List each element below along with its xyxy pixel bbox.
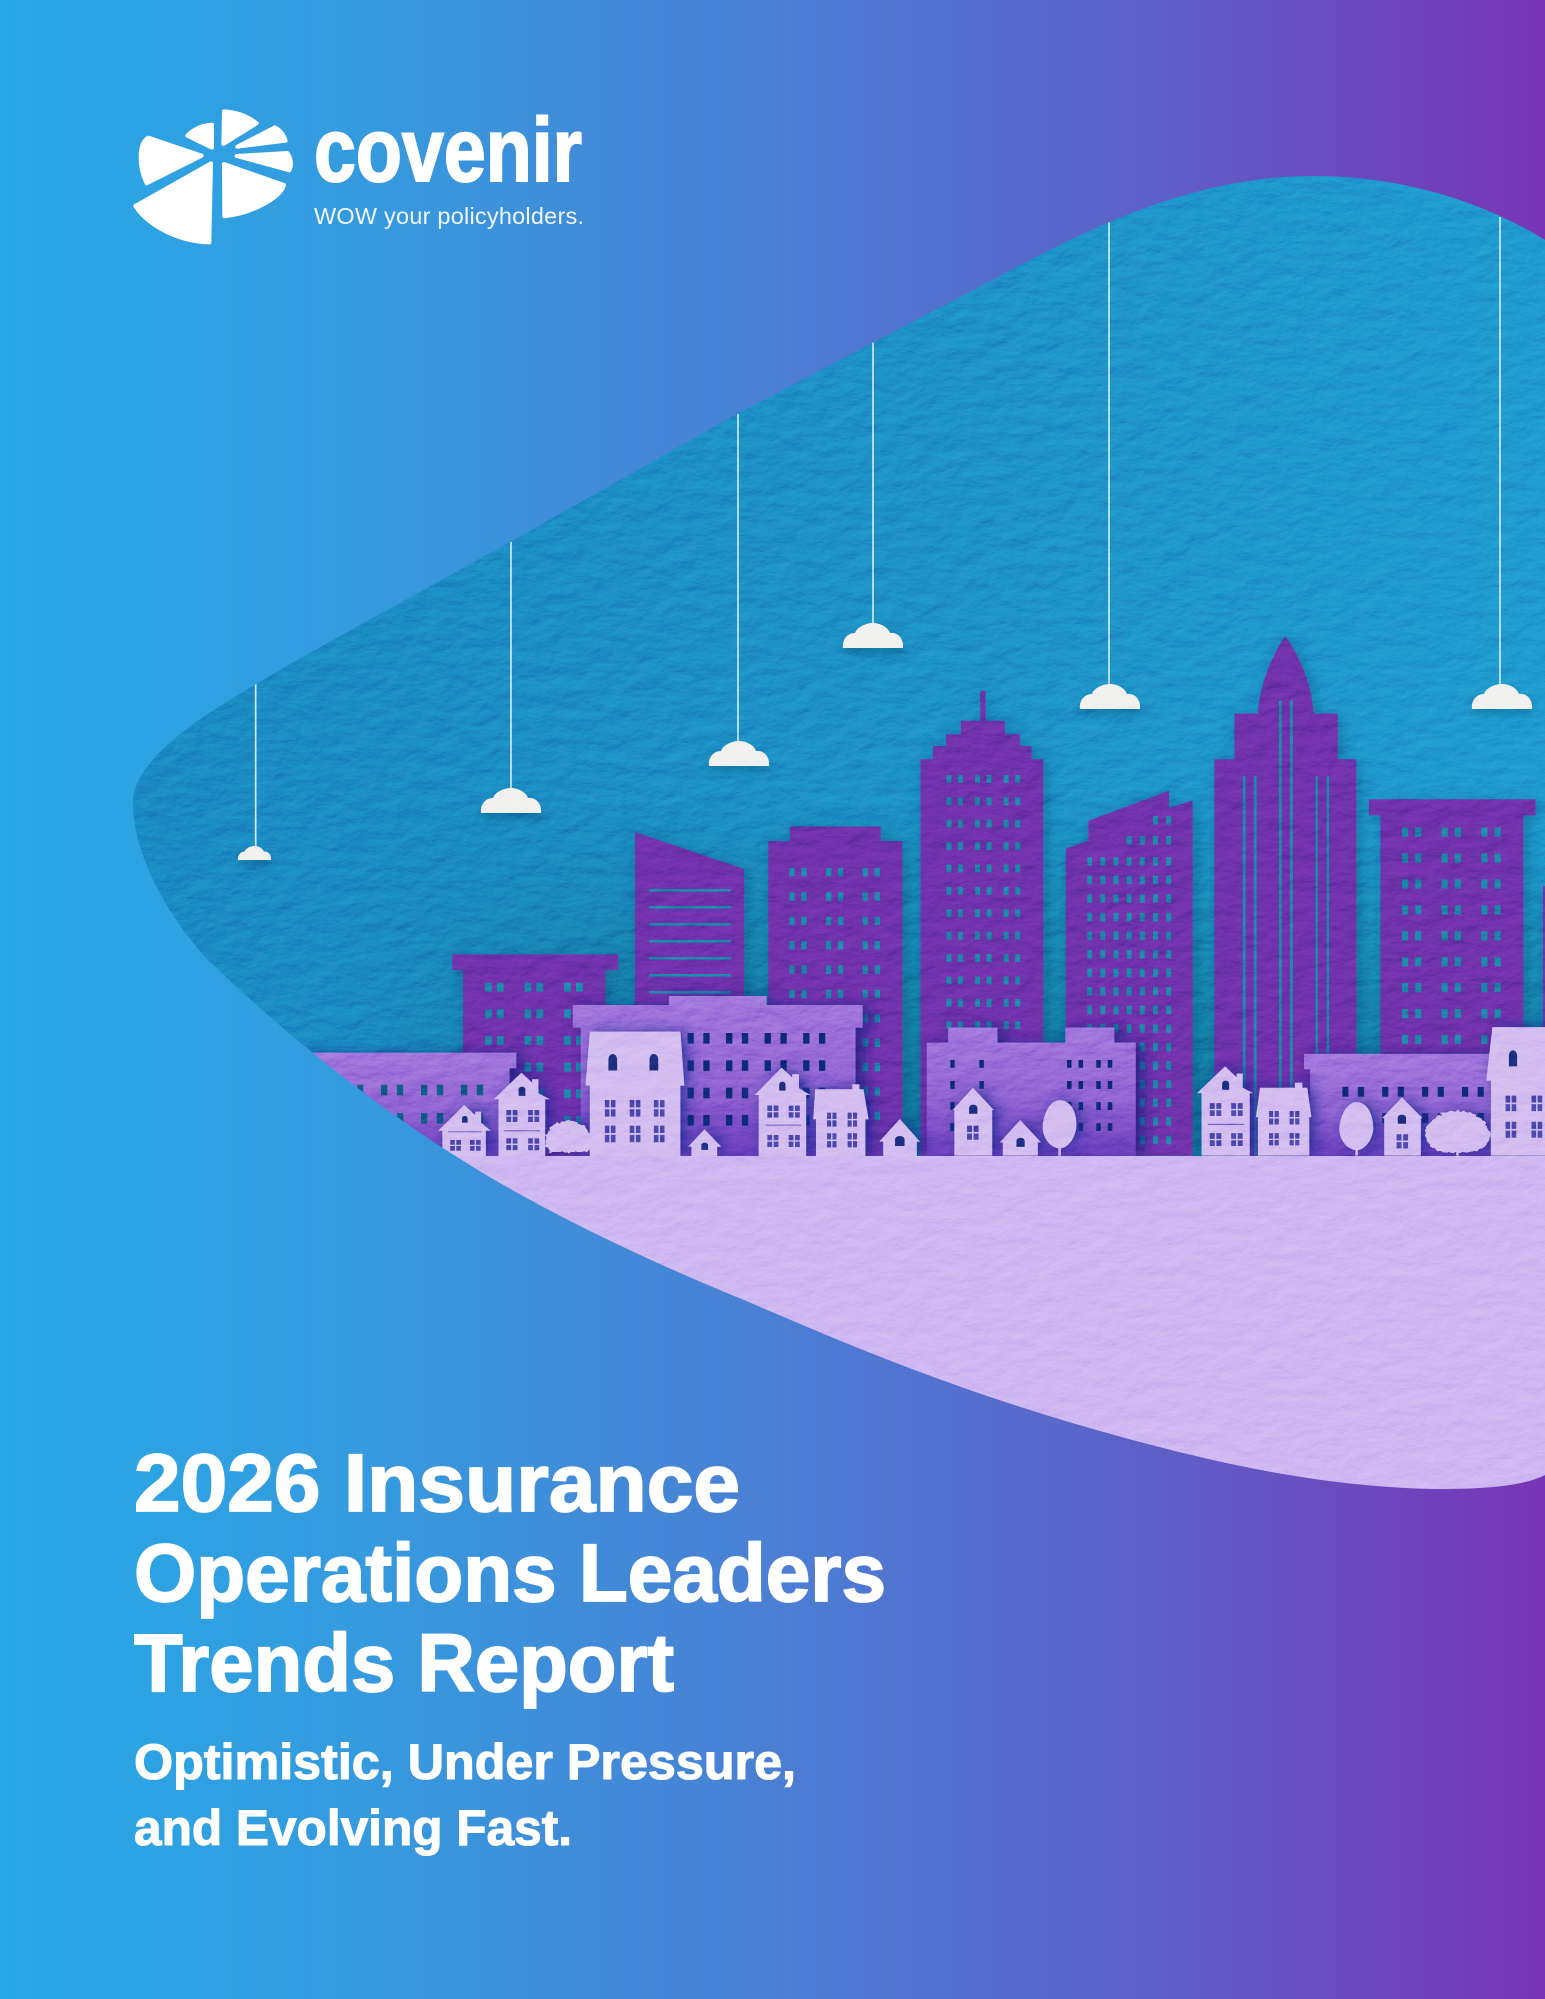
house 10 — [1197, 1066, 1253, 1156]
cloud 4 — [843, 623, 903, 648]
hanging clouds — [238, 217, 1532, 860]
cloud 3 — [709, 741, 769, 766]
houses and trees — [438, 1027, 1545, 1156]
subtitle — [134, 1734, 796, 1856]
building: twin-tower centre — [927, 1027, 1136, 1156]
ground — [120, 1156, 1545, 1506]
tower: capped left — [452, 954, 618, 1156]
tower: angled roof — [1066, 791, 1193, 1156]
cloud 1 — [238, 846, 271, 860]
bush 2 — [1425, 1111, 1490, 1153]
icon: logo pinwheel — [135, 111, 291, 242]
logo wordmark: covenir — [314, 101, 582, 201]
cloud 2 — [481, 788, 541, 813]
building: right — [1304, 1054, 1492, 1156]
cloud 5 — [1080, 684, 1140, 709]
tower: spire — [1214, 636, 1356, 1156]
title — [134, 1438, 886, 1709]
mid-rise buildings — [300, 996, 1492, 1157]
tree 2 — [1339, 1102, 1373, 1156]
house 6 — [879, 1119, 920, 1156]
title: Trends Report — [134, 1618, 674, 1709]
cloud 6 — [1472, 684, 1532, 709]
house 2 — [494, 1073, 550, 1156]
house 11 — [1256, 1083, 1311, 1156]
house 1 — [438, 1105, 491, 1156]
house 13 — [1486, 1027, 1545, 1156]
rear towers — [452, 636, 1545, 1157]
building: large centre-left — [573, 996, 863, 1156]
tree 1 — [1043, 1100, 1076, 1156]
houses: left group — [438, 1032, 920, 1156]
subtitle: and Evolving Fast. — [134, 1800, 572, 1856]
house 12 — [1382, 1097, 1422, 1156]
sky — [120, 170, 1545, 1170]
title: Operations Leaders — [134, 1528, 886, 1619]
tower: stepped with antenna — [921, 691, 1043, 1156]
house 8 — [953, 1088, 994, 1156]
building: far left — [300, 1053, 516, 1157]
logo: covenir — [135, 101, 584, 242]
paper texture overlay — [120, 170, 1545, 1500]
tower: capped right — [1369, 799, 1545, 1157]
logo tagline: WOW your policyholders. — [314, 203, 584, 229]
house 5 — [813, 1084, 869, 1156]
bush — [546, 1121, 591, 1152]
houses: right group — [953, 1027, 1545, 1156]
tower: slanted with stripes — [635, 832, 744, 1020]
subtitle: Optimistic, Under Pressure, — [134, 1734, 796, 1790]
house 9 — [1000, 1120, 1041, 1156]
big house — [585, 1032, 684, 1156]
tower: middle block — [768, 827, 902, 1156]
title: 2026 Insurance — [134, 1438, 740, 1529]
illustration: paper-cut city skyline in blob — [120, 170, 1545, 1506]
house 3 — [688, 1129, 721, 1156]
house 4 — [755, 1068, 810, 1156]
